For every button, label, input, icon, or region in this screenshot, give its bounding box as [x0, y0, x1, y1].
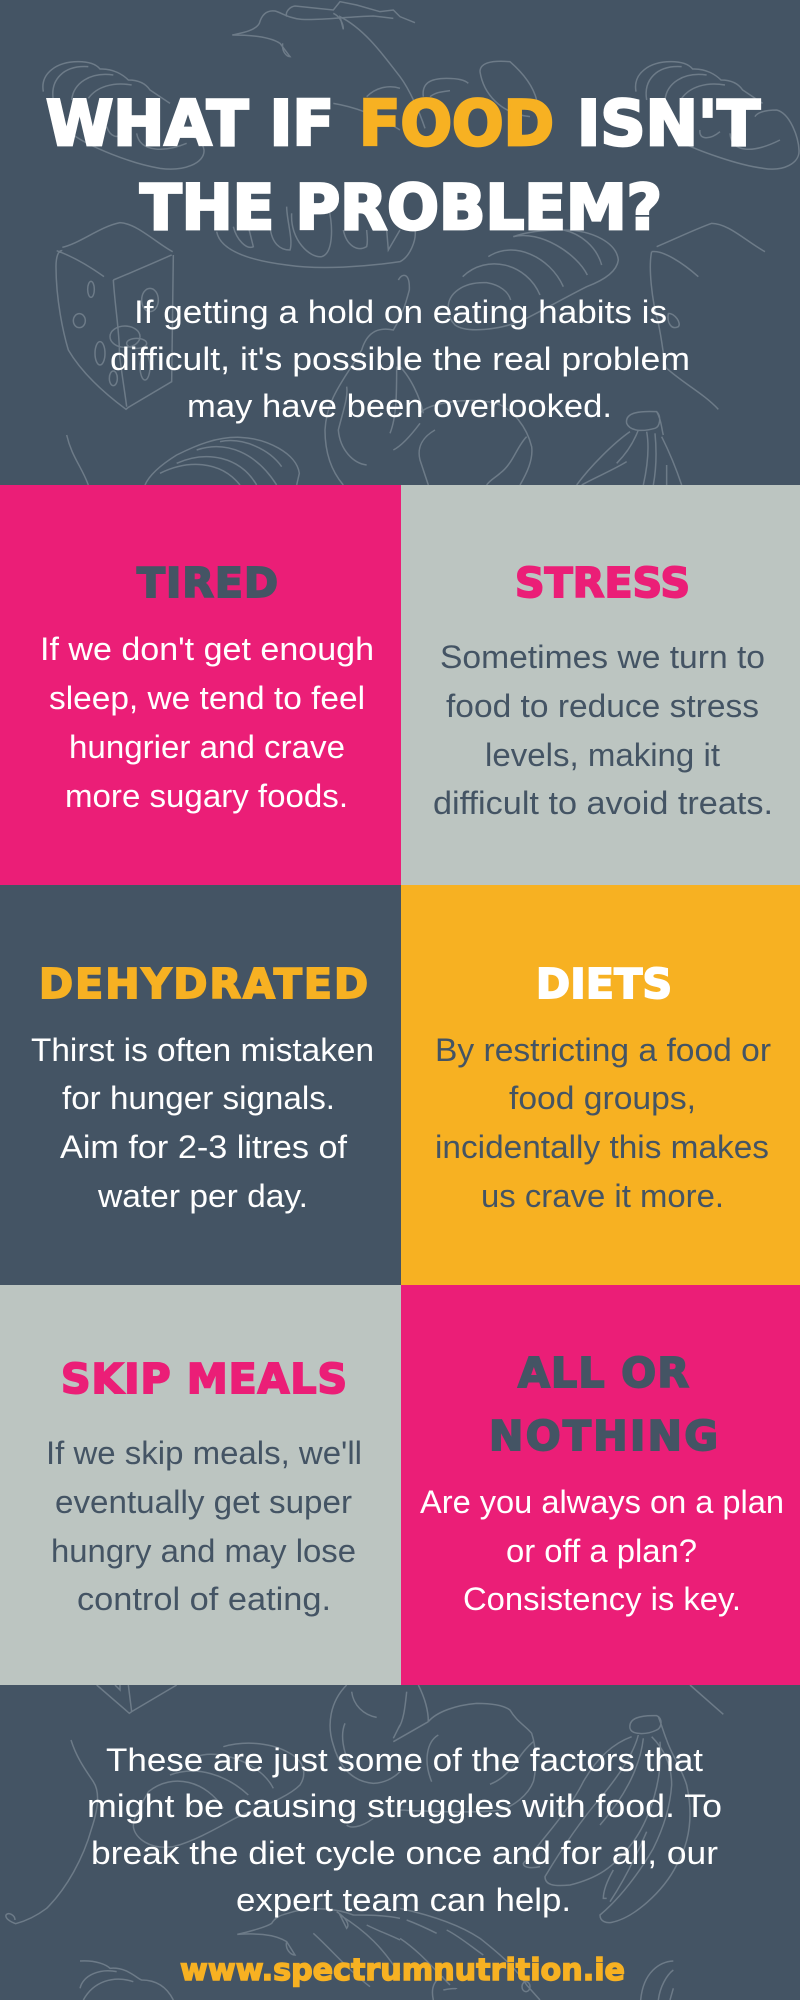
text: tired body: If we don't get enough: [40, 631, 374, 667]
intro text: [110, 294, 690, 424]
text: skip meals body: control of eating.: [77, 1581, 331, 1617]
intro text: may have been overlooked.: [187, 388, 612, 424]
intro text: If getting a hold on eating habits is: [134, 294, 667, 330]
text: dehydrated body: [31, 1032, 374, 1214]
text: all or nothing body: [420, 1484, 784, 1617]
text: all or nothing body: or off a plan?: [506, 1533, 697, 1569]
text: dehydrated body: Thirst is often mistaken: [31, 1032, 374, 1068]
title: ISN'T: [577, 87, 760, 160]
heading: diets: DIETS: [536, 960, 672, 1008]
text: tired body: more sugary foods.: [65, 778, 348, 814]
panel: all or nothing: [401, 1285, 800, 1685]
text: stress body: food to reduce stress: [446, 688, 759, 724]
text: diets body: By restricting a food or: [435, 1032, 771, 1068]
text: skip meals body: [46, 1435, 362, 1617]
heading: dehydrated: DEHYDRATED: [39, 960, 368, 1008]
panel: stress: [401, 485, 800, 885]
text: stress body: difficult to avoid treats.: [433, 785, 773, 821]
text: skip meals body: hungry and may lose: [51, 1533, 356, 1569]
heading: all or nothing: [489, 1349, 718, 1460]
text: all or nothing body: Are you always on a plan: [420, 1484, 784, 1520]
text: dehydrated body: Aim for 2-3 litres of: [60, 1129, 347, 1165]
heading: tired: TIRED: [137, 559, 278, 607]
heading: all or nothing: ALL OR: [518, 1349, 689, 1397]
panel: tired: [0, 485, 401, 885]
text: skip meals body: eventually get super: [55, 1484, 352, 1520]
text: diets body: us crave it more.: [481, 1178, 724, 1214]
text: tired body: hungrier and crave: [69, 729, 345, 765]
panel: dehydrated: [0, 885, 401, 1285]
footer food doodles: [6, 1685, 723, 2000]
text: dehydrated body: water per day.: [97, 1178, 308, 1214]
closing text: might be causing struggles with food. To: [87, 1788, 722, 1824]
text: all or nothing body: Consistency is key.: [463, 1581, 741, 1617]
panel: skip meals: [0, 1285, 401, 1685]
closing text: These are just some of the factors that: [106, 1742, 703, 1778]
panel: diets: [401, 885, 800, 1285]
closing text: [87, 1742, 722, 1918]
text: stress body: [433, 639, 773, 821]
text: dehydrated body: for hunger signals.: [62, 1080, 335, 1116]
heading: stress: STRESS: [515, 559, 690, 607]
text: stress body: levels, making it: [485, 737, 720, 773]
closing text: break the diet cycle once and for all, our: [91, 1835, 718, 1871]
heading: skip meals: SKIP MEALS: [61, 1355, 347, 1403]
text: tired body: sleep, we tend to feel: [49, 680, 365, 716]
title: THE PROBLEM?: [140, 171, 662, 244]
header food doodles: [43, 2, 799, 485]
text: skip meals body: If we skip meals, we'll: [46, 1435, 362, 1471]
title: WHAT IF: [46, 87, 334, 160]
title: [46, 87, 760, 244]
heading: all or nothing: NOTHING: [489, 1412, 718, 1460]
website url: www.spectrumnutrition.ie: [180, 1953, 625, 1988]
text: stress body: Sometimes we turn to: [440, 639, 765, 675]
closing text: expert team can help.: [236, 1882, 571, 1918]
text: diets body: [435, 1032, 771, 1214]
text: diets body: food groups,: [509, 1080, 696, 1116]
text: diets body: incidentally this makes: [435, 1129, 769, 1165]
text: tired body: [40, 631, 374, 814]
intro text: difficult, it's possible the real problem: [110, 341, 690, 377]
title: FOOD: [359, 87, 554, 160]
